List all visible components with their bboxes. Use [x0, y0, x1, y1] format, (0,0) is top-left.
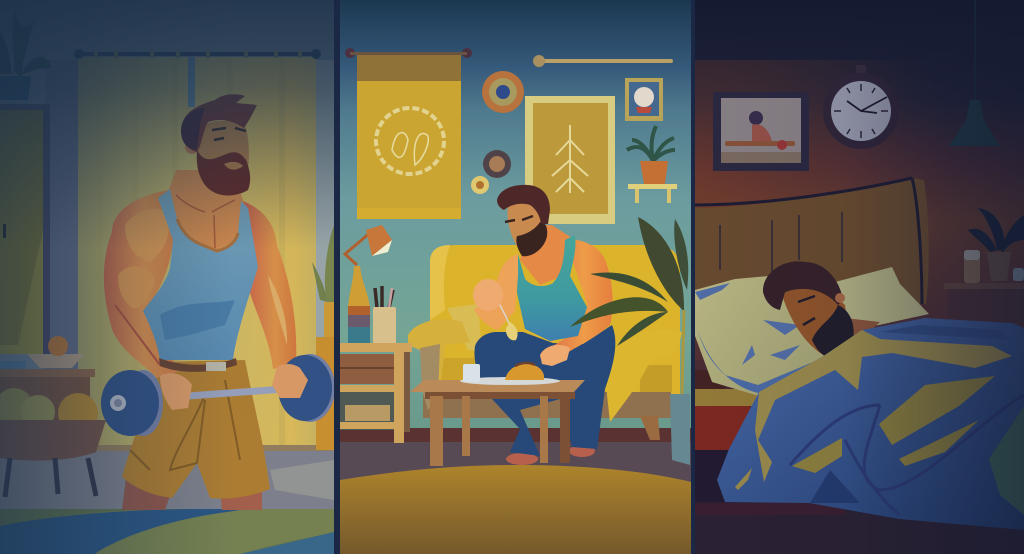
round wall decor small [471, 150, 511, 194]
side table with fruit [0, 336, 106, 497]
eyes [212, 128, 246, 140]
lamp [345, 225, 392, 343]
icon: potted plant top left [0, 51, 52, 100]
curtains [78, 57, 316, 445]
wall clock [823, 65, 899, 149]
divider left [334, 0, 340, 554]
face [782, 288, 850, 356]
sofa [408, 245, 682, 440]
pillow right [835, 267, 929, 330]
shading overlays [0, 0, 334, 554]
beard [516, 222, 547, 256]
trousers [474, 325, 615, 456]
nightstand with plant [944, 208, 1024, 325]
tank top [143, 189, 258, 360]
beard [197, 150, 250, 195]
blanket yellow top band [755, 330, 1012, 482]
yellow rug [340, 465, 691, 554]
floor band and carpet [340, 428, 691, 482]
pendant lamp [949, 0, 1000, 146]
pillow left [695, 276, 825, 396]
nightstand [340, 343, 412, 443]
wardrobe [0, 104, 50, 354]
ear and face [185, 144, 196, 154]
sleeping man [763, 261, 880, 356]
hand with knife [540, 345, 570, 366]
bed stripes [695, 370, 760, 450]
legs [122, 480, 170, 510]
pencil cup [373, 286, 396, 344]
left weight [138, 370, 163, 436]
curtain rod [74, 49, 321, 59]
neck [845, 318, 880, 345]
right arm [540, 238, 613, 364]
tank [517, 235, 587, 341]
chest and neck [168, 170, 245, 250]
framed picture [713, 92, 809, 171]
face [507, 201, 545, 248]
divider right [691, 0, 695, 554]
blanket [717, 318, 1024, 530]
man training [101, 94, 335, 510]
hair [763, 261, 843, 310]
round wall decor [482, 71, 524, 113]
man eating [473, 185, 615, 465]
large plant [570, 217, 690, 465]
right weight [304, 354, 334, 422]
hand with fork [473, 279, 518, 340]
hair [181, 94, 257, 152]
panel dimming [695, 0, 1024, 554]
panel: sleeping [695, 0, 1024, 554]
shorts [122, 360, 270, 499]
wall rod [533, 55, 673, 67]
right arm [243, 201, 296, 369]
tapestry [345, 48, 472, 219]
blanket folds [790, 395, 1024, 515]
barbell [188, 389, 285, 396]
small frame [625, 78, 663, 121]
hair [497, 185, 550, 224]
neck and chest [520, 225, 575, 285]
rug [0, 509, 334, 554]
shelf plant [627, 126, 677, 203]
blanket yellow streaks [879, 376, 995, 445]
left arm [474, 254, 518, 330]
framed picture [525, 96, 615, 224]
floor [695, 449, 1024, 554]
floor [76, 451, 334, 509]
hands [160, 373, 192, 410]
left arm [104, 190, 178, 378]
feet [506, 453, 538, 465]
headboard [695, 178, 929, 304]
panel: training [0, 0, 335, 554]
plant and vase right [312, 225, 334, 450]
coffee table [410, 363, 585, 466]
panel: eating [340, 0, 691, 554]
belt [159, 358, 237, 372]
beard [812, 305, 854, 356]
